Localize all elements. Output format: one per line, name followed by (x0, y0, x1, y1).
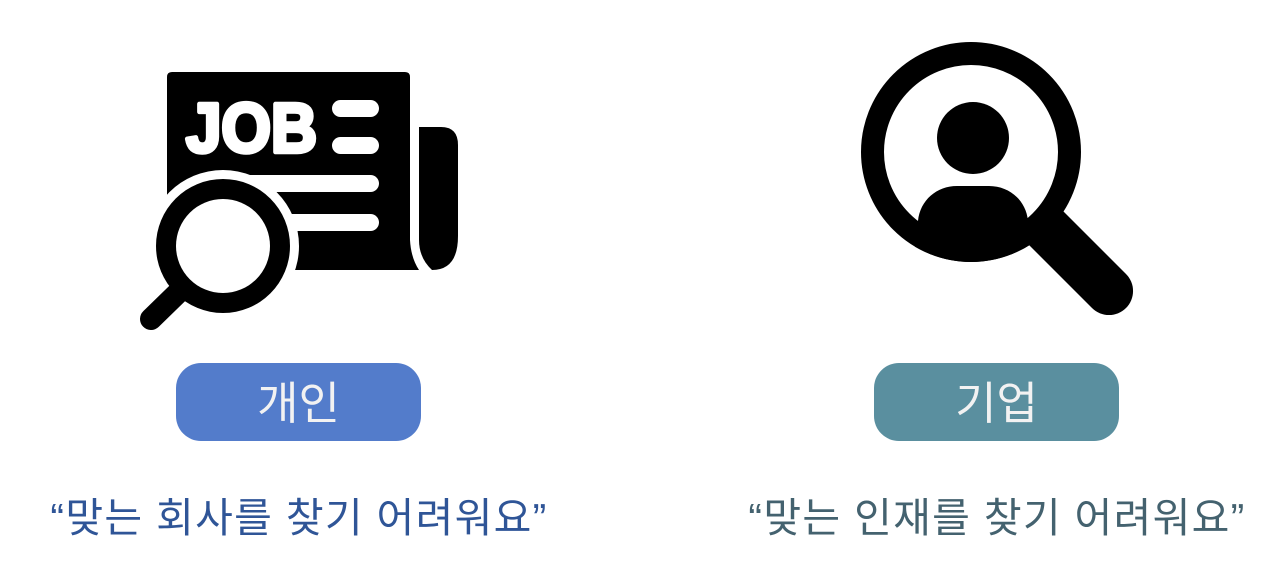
headline lines (230, 100, 379, 231)
label: company: 기업 (955, 378, 1038, 429)
label: individual: 개인 (257, 378, 340, 429)
label: company (874, 363, 1119, 441)
lens ring (872, 54, 1070, 250)
person head (937, 102, 1009, 174)
handle (1023, 205, 1133, 315)
person body (914, 186, 1030, 262)
newspaper page (167, 72, 419, 270)
icon: job newspaper with magnifying glass (140, 72, 458, 330)
JOB label: JOB (186, 89, 317, 167)
quote: individual: “맞는 회사를 찾기 어려워요” (50, 495, 548, 541)
icon: magnifying glass with person (861, 42, 1134, 315)
magnifying glass (147, 170, 299, 322)
newspaper roll (419, 127, 458, 270)
quote: company: “맞는 인재를 찾기 어려워요” (748, 495, 1246, 541)
label: individual (176, 363, 421, 441)
